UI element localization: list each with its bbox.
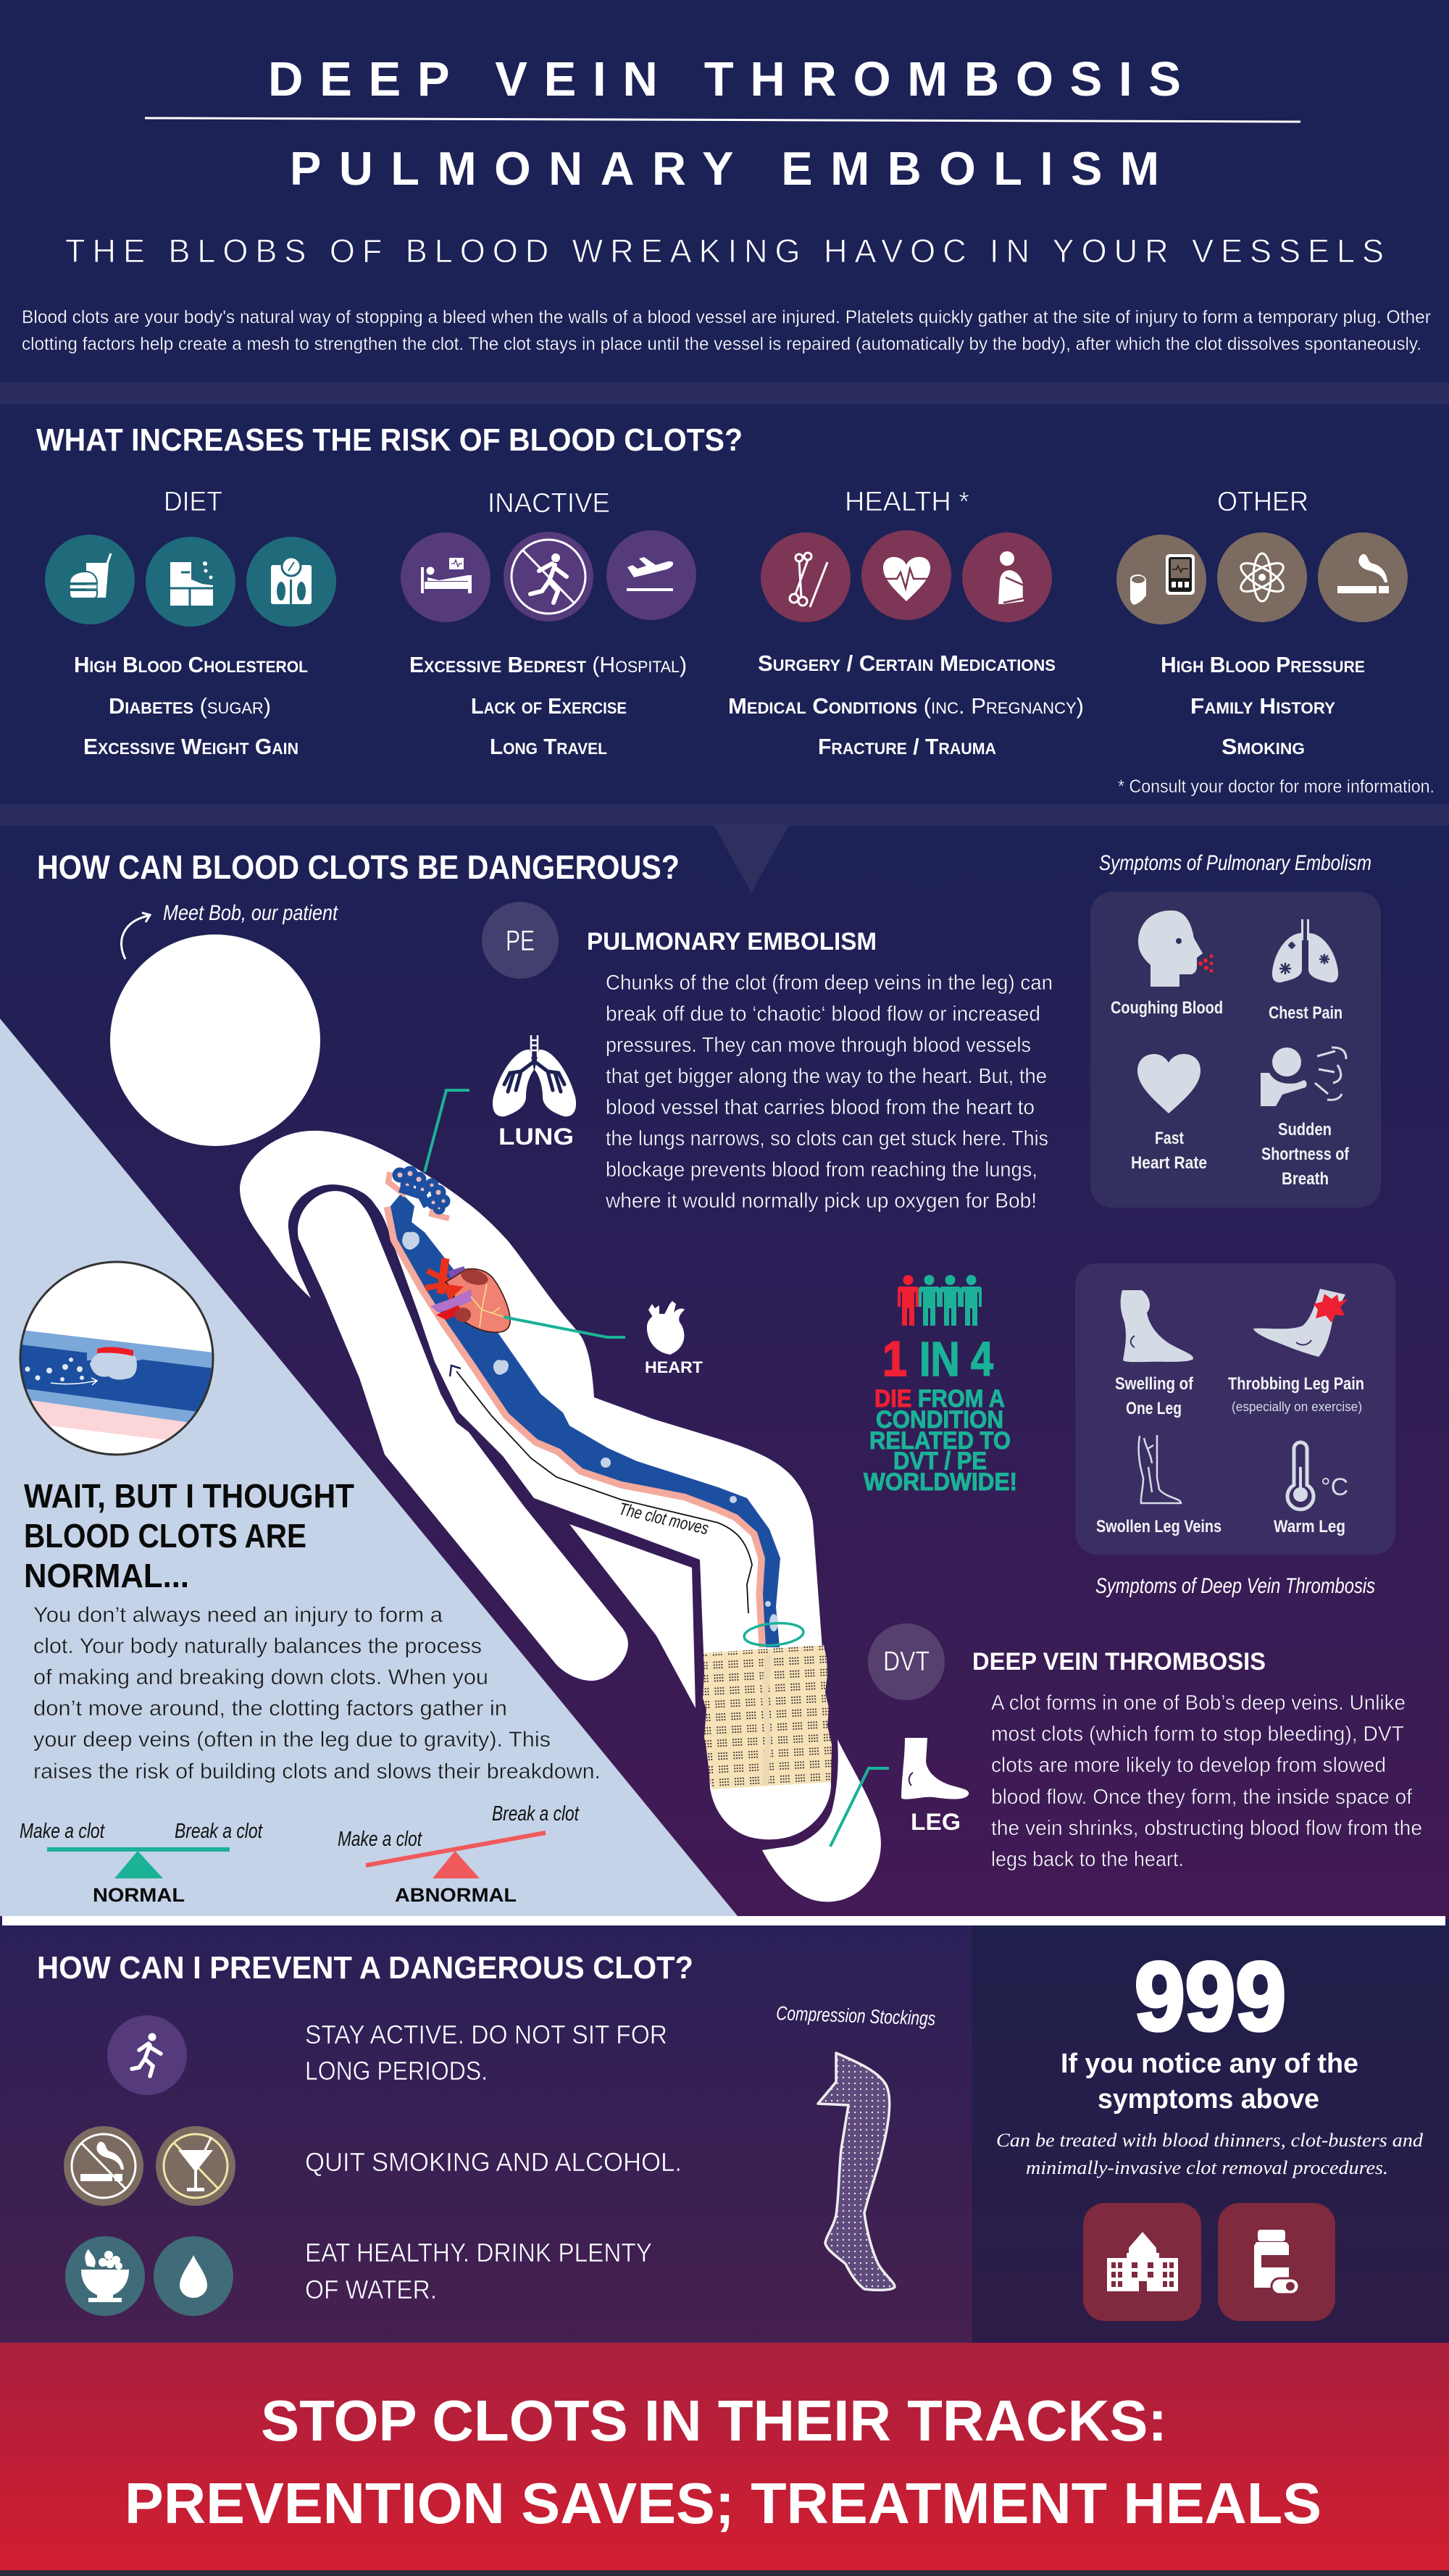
PE paragraph: that get bigger along the way to the heart. But, the bbox=[606, 1065, 1047, 1088]
DVT paragraph: the vein shrinks, obstructing blood flow from the bbox=[991, 1817, 1422, 1840]
label: compression stockings: Compression Stockings bbox=[776, 2002, 936, 2030]
risk section background bbox=[0, 404, 1449, 804]
risk list: inactive: Long Travel bbox=[490, 734, 607, 759]
magnified vessel circle bbox=[14, 1262, 232, 1455]
symptom: swollen leg veins: Swollen Leg Veins bbox=[1096, 1517, 1222, 1536]
paragraph: clots normal bbox=[33, 1603, 601, 1783]
tip: stay active: LONG PERIODS. bbox=[305, 2056, 488, 2086]
panel: normal clots background wedge bbox=[0, 1019, 738, 1916]
risk list: inactive: Excessive Bedrest (Hospital) bbox=[409, 652, 687, 677]
annotation: meet bob: Meet Bob, our patient bbox=[163, 901, 338, 925]
risk list: diet: High Blood Cholesterol bbox=[74, 652, 308, 677]
heading: prevent: HOW CAN I PREVENT A DANGEROUS CLOT? bbox=[37, 1950, 693, 1986]
icon: lung bbox=[493, 1035, 576, 1116]
icon: pill bottle bbox=[1218, 2203, 1335, 2321]
icon: sugar chocolate bar bbox=[146, 537, 235, 627]
risk list: health: Fracture / Trauma bbox=[818, 734, 996, 759]
statistic: 1 in 4: 1 bbox=[882, 1331, 907, 1387]
treatment note: Can be treated with blood thinners, clot-busters and bbox=[996, 2130, 1424, 2151]
category labels: OTHER bbox=[1217, 487, 1308, 517]
paragraph: clots normal: clot. Your body naturally balances the process bbox=[33, 1634, 482, 1658]
symptom: warm leg: Warm Leg bbox=[1274, 1517, 1345, 1536]
balance: normal: NORMAL bbox=[93, 1884, 185, 1906]
tip: eat healthy: OF WATER. bbox=[305, 2275, 437, 2304]
footnote: * Consult your doctor for more information. bbox=[1118, 777, 1435, 797]
icon: water drop bbox=[154, 2236, 233, 2316]
heading: wait: WAIT, BUT I THOUGHT bbox=[24, 1477, 354, 1515]
clots in vessel bbox=[402, 1232, 778, 1631]
annotation: meet bob bbox=[122, 901, 338, 959]
intro paragraph: clotting factors help create a mesh to strengthen the clot. The clot stays in place until the vessel is repaired (automatically by the body), after which the clot dissolves spontaneously. bbox=[22, 334, 1421, 354]
symptom: throbbing leg pain bbox=[1228, 1374, 1364, 1414]
icon: compression stocking bbox=[818, 2053, 895, 2290]
heading: dangerous: HOW CAN BLOOD CLOTS BE DANGEROUS? bbox=[37, 848, 680, 886]
label: the clot moves: The clot moves bbox=[617, 1500, 710, 1539]
risk list: diet: Excessive Weight Gain bbox=[83, 734, 298, 759]
tip: stay active: STAY ACTIVE. DO NOT SIT FOR bbox=[305, 2020, 667, 2049]
clot marker oval bbox=[743, 1621, 804, 1648]
banner: stop clots: PREVENTION SAVES; TREATMENT HEALS bbox=[125, 2471, 1321, 2535]
label: symptoms of deep vein thrombosis: Symptoms of Deep Vein Thrombosis bbox=[1095, 1574, 1375, 1598]
icon: cigarette bbox=[1318, 532, 1408, 622]
DVT paragraph: blood flow. Once they form, the inside space of bbox=[991, 1786, 1413, 1809]
banner: stop clots: STOP CLOTS IN THEIR TRACKS: bbox=[261, 2388, 1167, 2453]
PE paragraph bbox=[605, 971, 1053, 1213]
icon: plane bbox=[606, 530, 696, 620]
treatment note bbox=[996, 2130, 1424, 2178]
icon: arm in sling bbox=[962, 532, 1052, 622]
compression stocking on leg bbox=[703, 1645, 832, 1789]
symptom: chest pain: Chest Pain bbox=[1269, 1003, 1342, 1023]
statistic: 1 in 4: DVT / PE bbox=[893, 1447, 987, 1475]
risk list: health: Surgery / Certain Medications bbox=[758, 651, 1056, 676]
symptom: throbbing leg pain: (especially on exercise) bbox=[1232, 1400, 1362, 1414]
callout: heart: HEART bbox=[645, 1358, 703, 1376]
callout: leg bbox=[830, 1738, 969, 1847]
risk list: diet bbox=[74, 652, 308, 759]
category labels bbox=[164, 487, 1308, 519]
statistic: 1 in 4: RELATED TO bbox=[869, 1427, 1011, 1455]
category labels: INACTIVE bbox=[488, 488, 610, 519]
icon: heart with pulse bbox=[861, 530, 951, 620]
icon: coughing blood bbox=[1138, 911, 1213, 987]
DVT heading: DEEP VEIN THROMBOSIS bbox=[972, 1648, 1266, 1676]
panel: prevention bbox=[0, 1925, 972, 2343]
tip: eat healthy bbox=[305, 2238, 652, 2304]
category labels: DIET bbox=[164, 487, 222, 517]
symptom: throbbing leg pain: Throbbing Leg Pain bbox=[1228, 1374, 1364, 1394]
call to action bbox=[1061, 2049, 1358, 2115]
callout: leg: LEG bbox=[911, 1809, 961, 1835]
DVT paragraph: legs back to the heart. bbox=[991, 1848, 1184, 1871]
statistic: 1 in 4: WORLDWIDE! bbox=[864, 1468, 1017, 1496]
head bbox=[110, 934, 320, 1146]
icon: no smoking bbox=[64, 2126, 143, 2206]
tip: quit smoking: QUIT SMOKING AND ALCOHOL. bbox=[305, 2147, 682, 2177]
pointer triangle bbox=[714, 825, 789, 892]
white divider bbox=[2, 1916, 1445, 1925]
banner: stop clots bbox=[0, 2343, 1449, 2576]
heading: wait: BLOOD CLOTS ARE bbox=[24, 1517, 306, 1555]
arrow: clot movement bbox=[450, 1366, 752, 1613]
symptom: fast heart rate: Heart Rate bbox=[1131, 1153, 1207, 1173]
symptom: shortness of breath: Shortness of bbox=[1261, 1145, 1350, 1164]
symptom: shortness of breath: Sudden bbox=[1278, 1120, 1332, 1139]
intro paragraph: Blood clots are your body's natural way of stopping a bleed when the walls of a blood vessel are injured. Platelets quickly gather at the site of injury to form a temporary plug. Other bbox=[22, 307, 1431, 327]
title block bbox=[65, 52, 1384, 269]
statistic: 1 in 4: DIE FROM A bbox=[874, 1385, 1005, 1413]
DVT badge: DVT bbox=[883, 1647, 930, 1677]
risk list: inactive: Lack of Exercise bbox=[471, 693, 627, 719]
statistic: 1 in 4: IN 4 bbox=[919, 1332, 993, 1387]
PE paragraph: break off due to ‘chaotic‘ blood flow or increased bbox=[606, 1003, 1040, 1026]
paragraph: clots normal: of making and breaking down clots. When you bbox=[33, 1665, 488, 1689]
lung capillaries bbox=[388, 1168, 449, 1218]
icon: throbbing leg pain bbox=[1253, 1289, 1348, 1357]
icon: shortness of breath bbox=[1261, 1047, 1346, 1106]
paragraph: clots normal: You don’t always need an injury to form a bbox=[33, 1603, 443, 1627]
risk list: diet: Diabetes (sugar) bbox=[109, 693, 271, 719]
category labels: HEALTH * bbox=[845, 487, 969, 517]
panel: why clots are normal bbox=[14, 1262, 601, 1906]
other foot bbox=[762, 1739, 881, 1902]
risk list: other bbox=[1161, 652, 1365, 759]
icon: hospital bed bbox=[401, 532, 490, 622]
balance: abnormal: Make a clot bbox=[338, 1828, 423, 1851]
paragraph: clots normal: don’t move around, the clotting factors gather in bbox=[33, 1697, 507, 1720]
tip: eat healthy: EAT HEALTHY. DRINK PLENTY bbox=[305, 2238, 652, 2267]
panel: risk factors bbox=[36, 422, 1435, 797]
heading: risk: WHAT INCREASES THE RISK OF BLOOD CLOTS? bbox=[36, 422, 743, 458]
PE paragraph: pressures. They can move through blood vessels bbox=[606, 1034, 1031, 1057]
risk list: health: Medical Conditions (inc. Pregnancy) bbox=[728, 693, 1084, 719]
risk list: other: High Blood Pressure bbox=[1161, 652, 1365, 677]
balance: abnormal bbox=[338, 1802, 580, 1906]
title: deep vein thrombosis: DEEP VEIN THROMBOSIS bbox=[268, 52, 1181, 106]
call to action: symptoms above bbox=[1098, 2084, 1319, 2115]
symptom: swelling of one leg: One Leg bbox=[1126, 1399, 1182, 1418]
number: 999: 999 bbox=[1135, 1943, 1286, 2051]
risk list: other: Smoking bbox=[1222, 734, 1305, 759]
paragraph: clots normal: your deep veins (often in the leg due to gravity). This bbox=[33, 1728, 551, 1752]
risk list: other: Family History bbox=[1190, 693, 1335, 719]
main section background bbox=[0, 826, 1449, 1920]
panel: DVT symptoms bbox=[1075, 1263, 1395, 1555]
balance: abnormal: ABNORMAL bbox=[395, 1884, 517, 1906]
DVT paragraph bbox=[991, 1691, 1422, 1871]
balance: normal: Break a clot bbox=[175, 1820, 264, 1843]
treatment note: minimally-invasive clot removal procedures. bbox=[1026, 2157, 1388, 2178]
balance: normal: Make a clot bbox=[20, 1820, 106, 1843]
subtitle: THE BLOBS OF BLOOD WREAKING HAVOC IN YOUR VESSELS bbox=[65, 233, 1384, 269]
PE paragraph: where it would normally pick up oxygen for Bob! bbox=[605, 1189, 1037, 1213]
patient figure Bob bbox=[110, 934, 881, 1902]
symptom: coughing blood: Coughing Blood bbox=[1111, 998, 1223, 1018]
symptom: fast heart rate: Fast bbox=[1155, 1129, 1184, 1148]
symptom: fast heart rate bbox=[1131, 1129, 1207, 1173]
icon: no alcohol bbox=[156, 2126, 235, 2206]
icon: surgical tools bbox=[761, 532, 851, 622]
torso, bent arm and leg bbox=[240, 1131, 831, 1839]
heading: wait bbox=[24, 1477, 354, 1594]
risk list: inactive bbox=[409, 652, 687, 759]
DVT badge bbox=[868, 1623, 945, 1700]
icon: fruit bowl bbox=[65, 2236, 145, 2316]
PE heading: PULMONARY EMBOLISM bbox=[587, 928, 877, 955]
icon: no running bbox=[504, 532, 593, 622]
callout: heart bbox=[504, 1301, 703, 1376]
symptom: shortness of breath: Breath bbox=[1282, 1169, 1329, 1189]
icon: swollen leg veins bbox=[1139, 1435, 1181, 1503]
PE badge: PE bbox=[506, 925, 535, 957]
tip: stay active bbox=[305, 2020, 667, 2086]
PE paragraph: blockage prevents blood from reaching the lungs, bbox=[606, 1158, 1037, 1182]
icon: fast heart rate bbox=[1137, 1054, 1200, 1113]
icon: weighing scale bbox=[246, 537, 336, 627]
risk list: health bbox=[728, 651, 1084, 759]
icon: four people bbox=[898, 1275, 982, 1326]
icon: warm leg thermometer: °C bbox=[1321, 1473, 1348, 1501]
DVT paragraph: clots are more likely to develop from slowed bbox=[991, 1754, 1386, 1777]
panel: PE symptoms bbox=[1090, 892, 1381, 1208]
heading: wait: NORMAL... bbox=[24, 1557, 189, 1594]
balance: abnormal: Break a clot bbox=[492, 1802, 580, 1826]
icon: hospital bbox=[1083, 2203, 1201, 2321]
header background bbox=[0, 0, 1449, 382]
icon: chest pain lungs bbox=[1272, 919, 1338, 982]
inner arm bbox=[298, 1191, 628, 1681]
bent thigh bbox=[569, 1524, 696, 1708]
balance: normal bbox=[20, 1820, 264, 1906]
icon: heart bbox=[647, 1301, 685, 1355]
icon: foot bbox=[901, 1738, 969, 1799]
symptom: swelling of one leg bbox=[1115, 1374, 1194, 1418]
icon: blood pressure monitor bbox=[1116, 535, 1206, 624]
blood vessel bbox=[391, 1193, 780, 1647]
PE badge bbox=[482, 902, 559, 979]
paragraph: clots normal: raises the risk of building clots and slows their breakdown. bbox=[33, 1760, 601, 1783]
icon: atom bbox=[1217, 532, 1307, 622]
call to action: If you notice any of the bbox=[1061, 2049, 1358, 2079]
icon: runner bbox=[107, 2015, 187, 2095]
icon: swollen foot bbox=[1121, 1290, 1193, 1362]
statistic: 1 in 4: CONDITION bbox=[876, 1406, 1003, 1434]
icon: warm leg thermometer bbox=[1287, 1442, 1348, 1510]
intro paragraph bbox=[22, 307, 1431, 354]
symptom: swelling of one leg: Swelling of bbox=[1115, 1374, 1194, 1394]
DVT paragraph: most clots (which form to stop bleeding), DVT bbox=[991, 1723, 1404, 1746]
panel: 999 emergency bbox=[972, 1925, 1449, 2343]
PE paragraph: the lungs narrows, so clots can get stuck here. This bbox=[606, 1127, 1048, 1150]
heart illustration bbox=[425, 1258, 510, 1332]
title: pulmonary embolism: PULMONARY EMBOLISM bbox=[290, 142, 1159, 195]
PE paragraph: blood vessel that carries blood from the heart to bbox=[606, 1096, 1035, 1119]
statistic: 1 in 4 bbox=[864, 1275, 1017, 1496]
icon: burger and drink bbox=[45, 535, 135, 624]
label: symptoms of pulmonary embolism: Symptoms of Pulmonary Embolism bbox=[1099, 851, 1371, 875]
PE paragraph: Chunks of the clot (from deep veins in the leg) can bbox=[606, 971, 1053, 995]
callout: lung: LUNG bbox=[498, 1124, 574, 1150]
DVT paragraph: A clot forms in one of Bob’s deep veins. Unlike bbox=[991, 1691, 1406, 1715]
callout: lung bbox=[425, 1035, 576, 1172]
symptom: shortness of breath bbox=[1261, 1120, 1350, 1189]
